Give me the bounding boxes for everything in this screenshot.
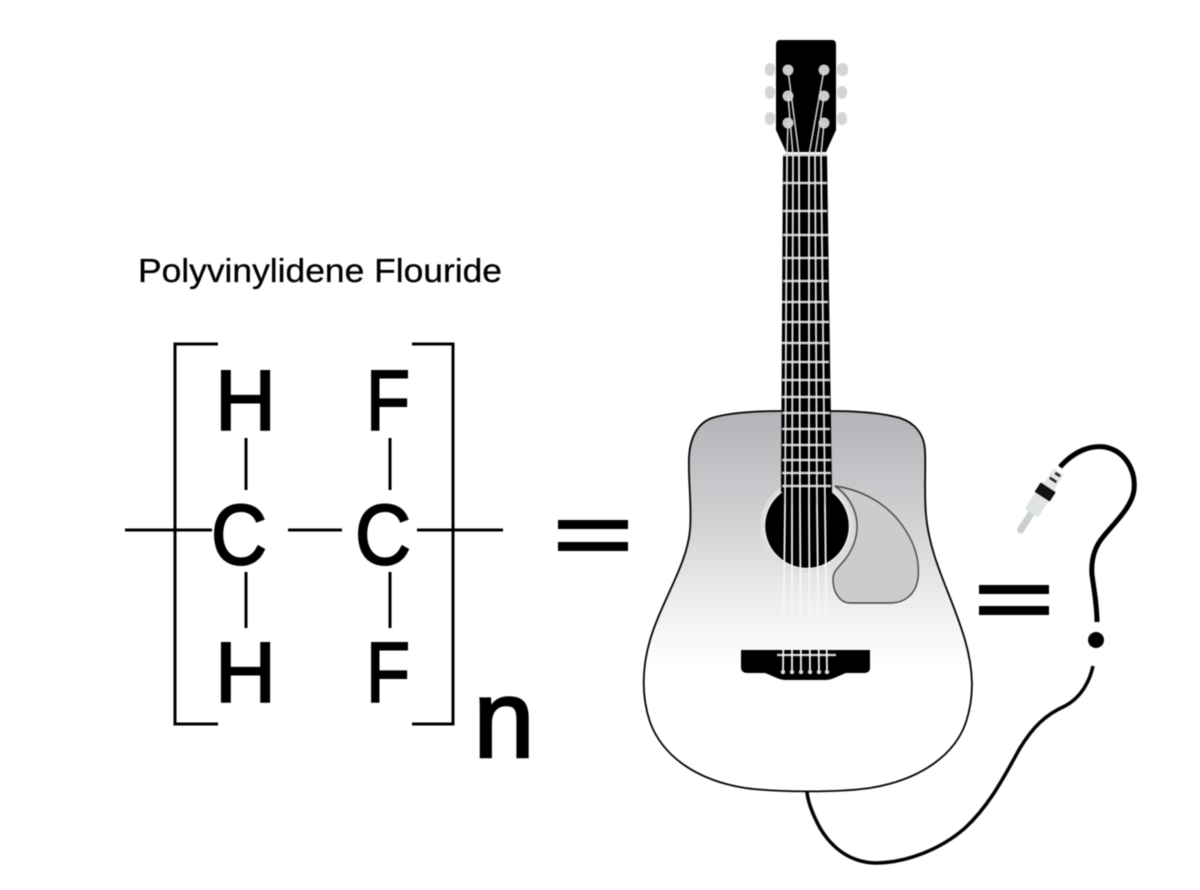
frets	[782, 155, 831, 486]
equals sign right	[979, 585, 1049, 615]
tuner posts	[782, 64, 830, 128]
chemical structure formula	[125, 344, 535, 781]
jack barrel	[1025, 481, 1057, 518]
acoustic guitar	[644, 40, 972, 791]
tuner buttons	[765, 63, 848, 125]
subscript n: n	[473, 658, 535, 781]
jack strain relief	[1050, 472, 1060, 482]
atom F top: F	[366, 354, 410, 449]
bonds	[125, 438, 503, 628]
bridge pins	[781, 670, 829, 674]
jack plug	[1011, 467, 1066, 538]
cable lower segment	[807, 666, 1093, 863]
atom F bottom: F	[366, 626, 410, 721]
cable upper segment	[1060, 447, 1134, 622]
sound hole	[764, 484, 850, 568]
strings on headstock	[787, 70, 824, 155]
atom H bottom: H	[215, 626, 276, 721]
strings over neck and body	[783, 155, 827, 672]
pickguard	[833, 486, 918, 603]
atom C right: C	[355, 488, 411, 583]
atom H top: H	[215, 354, 276, 449]
bridge saddle	[777, 654, 836, 656]
atom C left: C	[211, 488, 267, 583]
break dot in cable	[1088, 632, 1104, 648]
headstock	[776, 40, 836, 152]
sound hole ring	[760, 479, 854, 573]
guitar body	[644, 411, 972, 791]
jack tip	[1016, 510, 1035, 535]
right bracket	[412, 344, 453, 724]
title: polymer name: Polyvinylidene Flouride	[138, 252, 502, 289]
cable	[807, 447, 1134, 863]
jack black band	[1035, 483, 1056, 502]
equals sign left	[558, 520, 628, 551]
neck fretboard	[781, 154, 832, 492]
jack collar	[1044, 468, 1064, 490]
bridge	[741, 650, 870, 680]
left bracket	[175, 344, 218, 724]
